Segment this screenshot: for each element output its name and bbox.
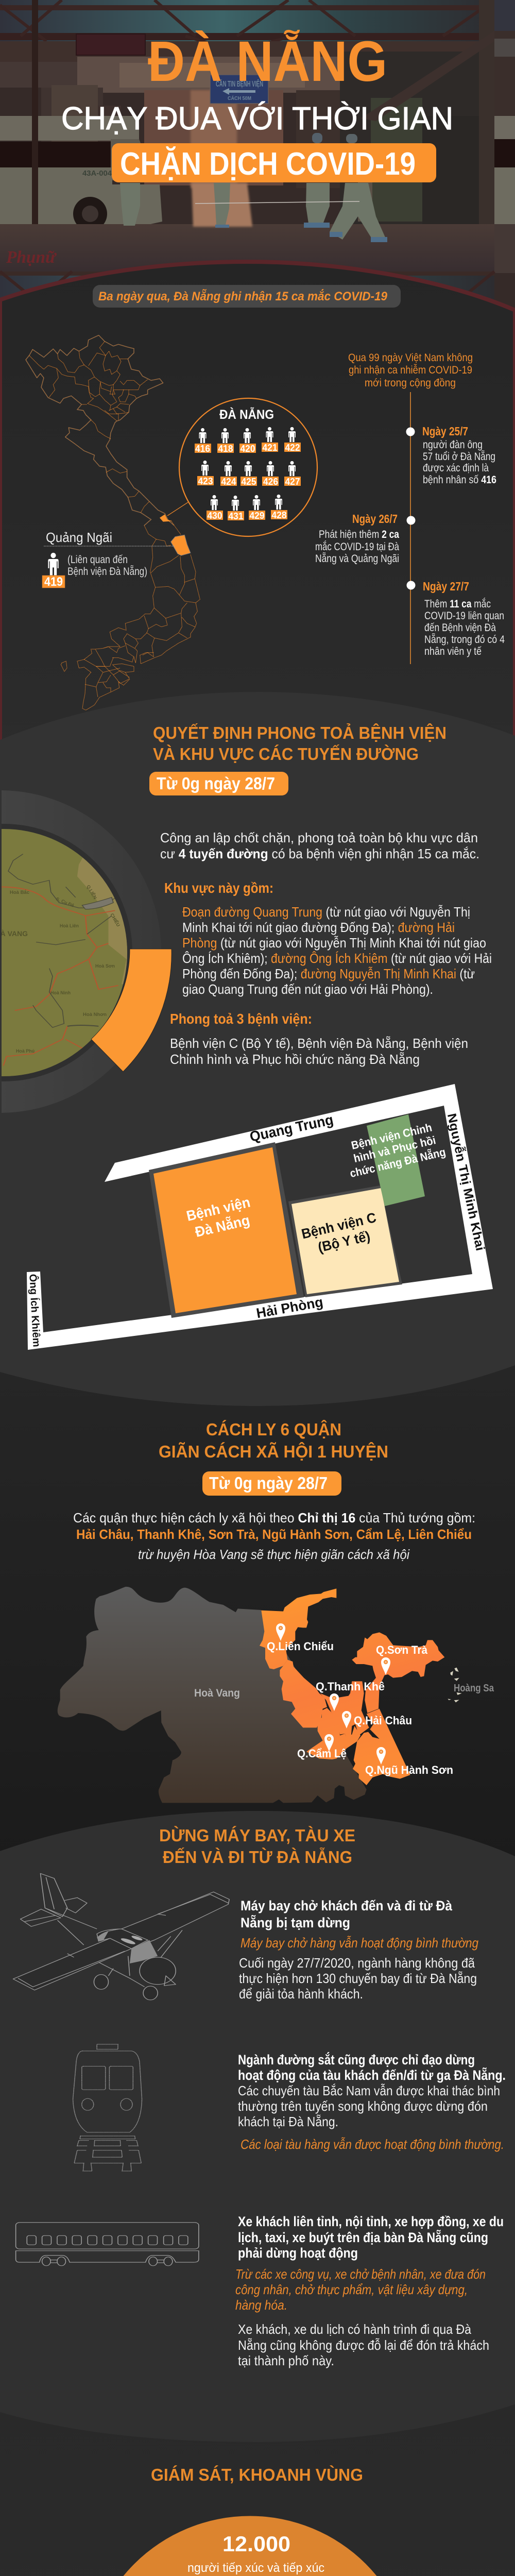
callout circle: Đà Nẵng patients: 423 <box>198 476 213 486</box>
text block: lockdown intro: cư 4 tuyến đường có ba bệnh viện ghi nhận 15 ca mắc. <box>160 846 479 861</box>
map: Vietnam south provinces <box>61 520 200 710</box>
title: Đà Nẵng: ĐÀ NẴNG <box>148 30 387 93</box>
text block: three hospitals: Chỉnh hình và Phục hồi chức năng Đà Nẵng <box>170 1052 420 1067</box>
text block: three hospitals <box>170 1011 468 1067</box>
date pill: from 0h 28/7: Từ 0g ngày 28/7 <box>157 774 275 793</box>
timeline: 99 days to 27/7: được xác định là <box>423 462 489 474</box>
summary pill: three days, 15 cases <box>93 285 401 308</box>
pins <box>276 1623 390 1765</box>
text block: rail <box>238 2052 506 2152</box>
text block: streets in the lockdown zone: giao Quang Trung đến nút giao với Hải Phòng). <box>182 981 433 997</box>
timeline: 99 days to 27/7: Phát hiện thêm 2 ca <box>319 529 399 540</box>
orange wedge on circular map <box>91 949 171 1072</box>
hospital block: C <box>288 1185 402 1297</box>
text block: road transport: phải dừng hoạt động <box>238 2245 358 2261</box>
district labels: Hoà Vang <box>194 1687 240 1699</box>
callout circle: Đà Nẵng patients: 427 <box>285 477 300 487</box>
text block: planes: để giải tỏa hành khách. <box>239 1986 363 2002</box>
district labels: Q.Hải Châu <box>354 1714 412 1727</box>
panel: transport section background <box>0 1811 515 2442</box>
text block: streets in the lockdown zone: Ông Ích Khiêm); đường Ông Ích Khiêm (từ nút giao với Hải <box>182 951 492 966</box>
heading: isolate 6 districts: CÁCH LY 6 QUẬN <box>206 1420 341 1439</box>
district labels: Hoàng Sa <box>454 1683 494 1694</box>
circular map decoration <box>2 790 127 1113</box>
text block: lockdown intro <box>160 830 479 861</box>
old map of Hòa Vang: Q.LIÊN <box>85 884 98 900</box>
callout circle: Đà Nẵng patients: 426 <box>263 477 278 487</box>
callout: Quảng Ngãi patient 419: 419 <box>44 575 63 589</box>
photo: faint Phụ nữ watermark: Phụnữ <box>6 248 57 267</box>
photo: blue canteen sign: CĂN TIN BỆNH VIỆN <box>216 79 263 89</box>
callout circle: Đà Nẵng patients: 428 <box>272 510 286 520</box>
street labels: Nguyễn Thị Minh Khai <box>444 1112 488 1252</box>
map: Đà Nẵng districts <box>58 1587 494 1803</box>
text block: rail: khách tại Đà Nẵng. <box>238 2114 338 2129</box>
urban districts <box>260 1588 444 1785</box>
district labels: Q.Cẩm Lệ <box>297 1747 347 1760</box>
callout circle: Đà Nẵng patients: 429 <box>249 511 265 521</box>
text block: planes: Nẵng bị tạm dừng <box>241 1914 350 1930</box>
photo: dark sign with text <box>76 34 145 55</box>
text block: planes: Cuối ngày 27/7/2020, ngành hàng không đã <box>239 1955 475 1971</box>
text block: streets in the lockdown zone: Đoạn đường Quang Trung (từ nút giao với Nguyễn Thị <box>182 904 470 920</box>
hospital block: orthopedic and rehabilitation <box>349 1114 447 1206</box>
heading: stop planes, trains, buses <box>159 1826 355 1867</box>
text block: road transport: tại thành phố này. <box>238 2353 334 2368</box>
photo: hospital building <box>41 0 494 224</box>
heading: lockdown decision: VÀ KHU VỰC CÁC TUYẾN ĐƯỜNG <box>153 744 419 764</box>
timeline: 99 days to 27/7: Thêm 11 ca mắc <box>424 598 491 610</box>
photo: roof and steel trusses <box>0 0 494 88</box>
photo: blue canteen sign: CÁCH 50M <box>228 95 251 101</box>
hospital block: orthopedic and rehabilitation: chức năng Đà Nẵng <box>349 1145 447 1180</box>
connector line from map to circle <box>167 502 188 516</box>
old map of Hòa Vang: Hoà Ninh <box>50 990 71 995</box>
text block: road transport: Nẵng cũng không được đỗ lại để đón trả khách <box>238 2337 489 2353</box>
timeline: 99 days to 27/7: đến Bệnh viện Đà <box>424 622 496 634</box>
old map of Hòa Vang <box>2 829 127 1076</box>
heading: monitoring and zoning: GIÁM SÁT, KHOANH VÙNG <box>151 2465 363 2484</box>
text block: districts list: trừ huyện Hòa Vang sẽ thực hiện giãn cách xã hội <box>138 1547 410 1562</box>
timeline: 99 days to 27/7: Ngày 27/7 <box>423 580 469 593</box>
header photo background <box>0 0 515 314</box>
subtitle pill: chặn dịch COVID-19: CHẶN DỊCH COVID-19 <box>120 146 416 182</box>
islands: Hoàng Sa <box>448 1668 462 1702</box>
text block: three hospitals: Phong toả 3 bệnh viện: <box>170 1011 312 1027</box>
callout circle: Đà Nẵng patients: 418 <box>218 444 233 454</box>
district labels: Q.Liên Chiểu <box>267 1640 334 1653</box>
timeline: 99 days to 27/7: mới trong cộng đồng <box>365 377 456 389</box>
map: Quảng Ngãi highlight on national map <box>171 535 191 555</box>
text block: rail: thường trên tuyến song không được dừng đón <box>238 2098 488 2114</box>
heading: stop planes, trains, buses: DỪNG MÁY BAY, TÀU XE <box>159 1826 355 1845</box>
hospital block: C: Bệnh viện C <box>300 1210 377 1242</box>
text block: districts list: Hải Châu, Thanh Khê, Sơn Trà, Ngũ Hành Sơn, Cẩm Lệ, Liên Chiểu <box>76 1527 472 1542</box>
callout circle: Đà Nẵng patients: 420 <box>240 444 255 454</box>
callout circle: Đà Nẵng patients: 424 <box>221 477 236 487</box>
timeline: 99 days to 27/7 <box>315 352 505 664</box>
text block: road transport: Xe khách, xe du lịch có hành trình đi qua Đà <box>238 2321 471 2337</box>
text block: rail: Ngành đường sắt cũng được chỉ đạo dừng <box>238 2052 475 2067</box>
map: Đà Nẵng highlight on national map <box>160 514 171 522</box>
diagram: street map of lockdown zone <box>27 1084 493 1350</box>
summary pill: three days, 15 cases: Ba ngày qua, Đà Nẵng ghi nhận 15 ca mắc COVID-19 <box>98 289 388 303</box>
street labels: Ông Ích Khiêm <box>27 1274 43 1347</box>
callout: Quảng Ngãi patient 419 <box>42 530 175 589</box>
photo: lit doorway <box>192 183 252 227</box>
callout circle: Đà Nẵng patients: 421 <box>263 443 277 453</box>
text block: streets in the lockdown zone: Phòng (từ nút giao với Nguyễn Thị Minh Khai tới nút giao <box>182 935 486 951</box>
text block: planes: Máy bay chở hàng vẫn hoạt động bình thường <box>241 1935 478 1951</box>
text block: planes: Máy bay chở khách đến và đi từ Đà <box>241 1898 453 1913</box>
icon: plane <box>13 1873 229 2000</box>
callout circle: Đà Nẵng patients: 430 <box>207 511 222 521</box>
hospital block: orthopedic and rehabilitation: hình và Phục hồi <box>352 1133 437 1165</box>
callout: Quảng Ngãi patient 419: (Liên quan đến <box>67 554 128 566</box>
photo: repeated edge image at right <box>494 0 515 273</box>
text block: planes <box>239 1898 478 2002</box>
hospital block: Đà Nẵng: Đà Nẵng <box>194 1212 251 1240</box>
district labels: Q.Thanh Khê <box>316 1680 385 1693</box>
old map of Hòa Vang: CHIỂU <box>109 912 122 927</box>
panel: lockdown section background <box>0 692 515 1406</box>
hospital block: Đà Nẵng <box>149 1142 304 1318</box>
district labels <box>194 1640 494 1776</box>
streets <box>27 1084 493 1350</box>
text block: road transport: công nhân, chở thực phẩm, vật liệu xây dựng, <box>235 2282 468 2297</box>
icon: train front <box>73 2044 142 2171</box>
callout circle: Đà Nẵng patients <box>179 398 317 536</box>
heading: lockdown decision <box>153 723 447 764</box>
old map of Hòa Vang: Hoà Sơn <box>95 963 115 969</box>
text block: lockdown intro: Công an lập chốt chặn, phong toả toàn bộ khu vực dân <box>160 830 478 845</box>
icon: bus / coach side view <box>16 2223 199 2266</box>
old map of Hòa Vang: S. Cu Đê <box>55 896 75 908</box>
street labels: Quang Trung <box>248 1111 335 1145</box>
callout circle: Đà Nẵng patients: 431 <box>229 511 243 521</box>
timeline: 99 days to 27/7: 57 tuổi ở Đà Nẵng <box>423 451 495 463</box>
timeline: 99 days to 27/7: Ngày 26/7 <box>352 512 398 526</box>
callout circle: Đà Nẵng patients: 425 <box>241 477 256 487</box>
photo: green-grey ambulance van: 43A-004 <box>82 169 112 178</box>
text block: streets in the lockdown zone: Phòng đến Đống Đa); đường Nguyễn Thị Minh Khai (từ <box>182 966 475 981</box>
chart: nested circles of quarantined people <box>87 2516 414 2576</box>
heading: isolate 6 districts: GIÃN CÁCH XÃ HỘI 1 HUYỆN <box>159 1442 388 1461</box>
timeline: 99 days to 27/7: mắc COVID-19 tại Đà <box>315 541 399 553</box>
callout: Quảng Ngãi patient 419: Quảng Ngãi <box>46 530 112 545</box>
old map of Hòa Vang: Hoà Phú <box>16 1048 35 1054</box>
timeline: 99 days to 27/7: Nẵng và Quảng Ngãi <box>315 553 399 565</box>
old map of Hòa Vang: Hoà Bắc <box>10 889 29 895</box>
panel: isolation section background <box>0 1365 515 1860</box>
circle: 12,000 contacts: người tiếp xúc và tiếp xúc <box>187 2561 324 2575</box>
timeline: 99 days to 27/7: ghi nhận ca nhiễm COVID-19 <box>349 364 472 376</box>
text block: road transport: hàng hóa. <box>235 2297 287 2313</box>
photo: green-grey ambulance van <box>0 0 162 231</box>
timeline: 99 days to 27/7: nhân viên y tế <box>424 646 482 657</box>
hospital block: Đà Nẵng: Bệnh viện <box>185 1194 252 1224</box>
text block: streets in the lockdown zone: Minh Khai tới nút giao đường Đống Đa); đường Hải <box>182 920 455 935</box>
section panel: dark timeline background with curved top <box>0 262 515 773</box>
photo: thin floor line <box>195 201 359 204</box>
timeline: 99 days to 27/7: Qua 99 ngày Việt Nam không <box>348 352 473 364</box>
callout circle: Đà Nẵng patients: 422 <box>285 443 300 453</box>
text block: districts list <box>73 1510 475 1562</box>
district labels: Q.Sơn Trà <box>376 1643 428 1656</box>
photo: floor tiles <box>0 224 494 273</box>
text block: districts list: Các quận thực hiện cách ly xã hội theo Chỉ thị 16 của Thủ tướng gồm: <box>73 1510 475 1526</box>
photo: medical staff in protective suits <box>120 133 387 242</box>
text block: three hospitals: Bệnh viện C (Bộ Y tế), Bệnh viện Đà Nẵng, Bệnh viện <box>170 1036 468 1051</box>
map: Vietnam north provinces <box>26 335 174 526</box>
circle: 12,000 contacts: 12.000 <box>222 2532 290 2556</box>
timeline: 99 days to 27/7: người đàn ông <box>423 439 483 451</box>
hospital block: orthopedic and rehabilitation: Bệnh viện Chỉnh <box>350 1121 433 1152</box>
text block: planes: thực hiện hơn 130 chuyến bay đi từ Đà Nẵng <box>239 1971 477 1986</box>
photo: blue canteen sign <box>210 75 268 104</box>
photo: repeated image roof below main photo <box>0 270 495 299</box>
text block: road transport <box>235 2214 504 2368</box>
panel: monitoring section background <box>0 2404 515 2576</box>
district labels: Q.Ngũ Hành Sơn <box>365 1764 453 1776</box>
hospital block: C: (Bộ Y tế) <box>316 1228 372 1255</box>
circle: 12,000 contacts <box>87 2516 414 2576</box>
callout circle: Đà Nẵng patients: ĐÀ NẴNG <box>219 407 274 422</box>
subtitle: chạy đua với thời gian: CHẠY ĐUA VỚI THỜI GIAN <box>61 101 453 137</box>
old map of Hòa Vang: Hoà Liên <box>60 923 79 928</box>
text block: streets in the lockdown zone <box>164 880 492 997</box>
street labels: Hải Phòng <box>255 1294 324 1321</box>
date pill: from 0h 28/7: Từ 0g ngày 28/7 <box>209 1473 328 1493</box>
street labels <box>27 1111 488 1347</box>
timeline: 99 days to 27/7: Ngày 25/7 <box>422 425 468 438</box>
callout: Quảng Ngãi patient 419: Bệnh viện Đà Nẵng) <box>67 566 147 578</box>
timeline: 99 days to 27/7: bệnh nhân số 416 <box>423 474 496 486</box>
callout circle: Đà Nẵng patients: 416 <box>195 444 210 454</box>
district: Hòa Vang <box>58 1587 367 1803</box>
heading: lockdown decision: QUYẾT ĐỊNH PHONG TOẢ BỆNH VIỆN <box>153 723 447 742</box>
heading: isolate 6 districts <box>159 1420 388 1461</box>
text block: streets in the lockdown zone: Khu vực này gồm: <box>164 880 273 896</box>
heading: stop planes, trains, buses: ĐẾN VÀ ĐI TỪ ĐÀ NẴNG <box>163 1848 352 1867</box>
old map of Hòa Vang: Hoà Nhơn <box>83 1012 107 1017</box>
